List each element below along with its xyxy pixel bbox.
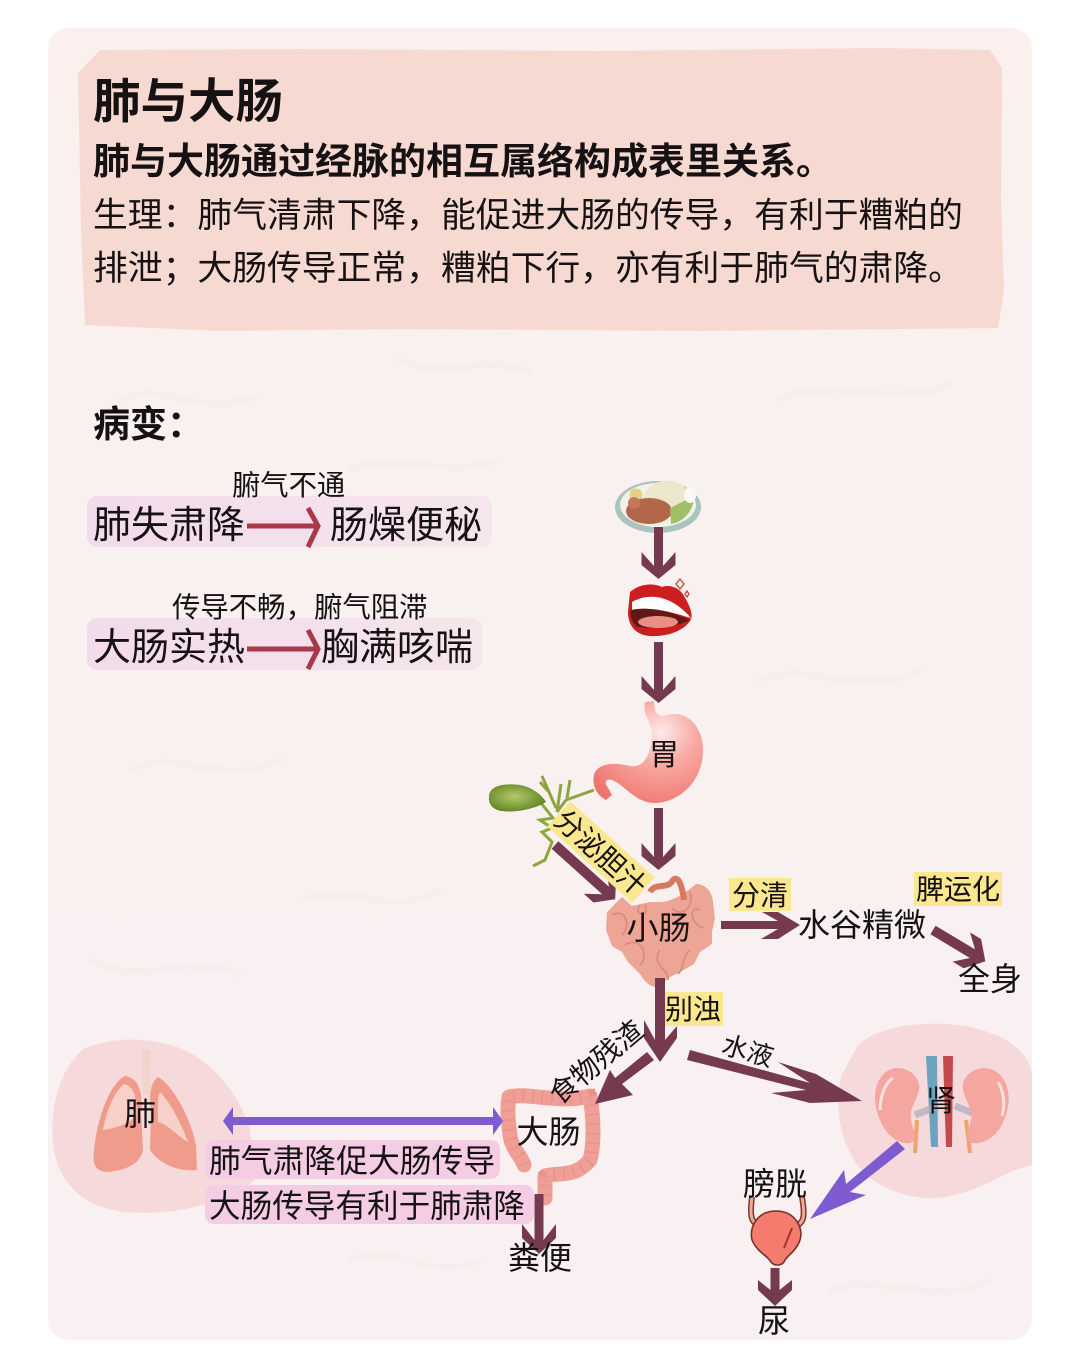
kidney background blob [838,1024,1032,1198]
label: kidney: 肾 [926,1085,956,1118]
arrow: large intestine to stool [522,1194,556,1254]
arrow: fluid to kidney [687,1050,862,1103]
panel: intro [78,48,1004,331]
label: lung: 肺 [124,1096,156,1132]
label: bladder: 膀胱 [743,1166,807,1202]
pathology row 2 [87,592,482,670]
label: spleen transport: 脾运化 [916,874,1000,905]
arrow: stomach to small intestine [642,808,676,870]
icon: lungs [94,1050,197,1172]
label: stomach: 胃 [649,739,679,772]
callout: lung-intestine interaction: 肺气肃降促大肠传导 [209,1143,495,1179]
pathology row 2: 传导不畅，腑气阻滞 [172,592,428,624]
heading: pathology: 病变： [93,404,204,445]
arrow: small intestine to essence [721,912,800,939]
arrow: residue to large intestine [595,1052,654,1104]
label: stool: 粪便 [508,1240,572,1276]
label: separate clear: 分清 [732,880,788,911]
icon: large intestine [508,1096,593,1198]
arrow: lung and large intestine double arrow [223,1107,503,1135]
icon: stomach [594,701,703,803]
body text: 生理：肺气清肃下降，能促进大肠的传导，有利于糟粕的 [93,196,963,235]
pathology row 2: 胸满咳喘 [321,627,473,669]
arrow: bile to small intestine [544,832,627,912]
arrow: red [247,630,318,669]
body text [93,196,963,288]
label: separate turbid: 别浊 [665,994,721,1025]
title: 肺与大肠 [93,76,283,129]
icon: food plate [615,481,701,533]
pathology row 1: 肺失肃降 [93,505,245,547]
pathology row 1: 肠燥便秘 [330,505,482,547]
label: urine: 尿 [758,1303,790,1339]
arrow: kidney to bladder [810,1141,905,1219]
arrow: food to mouth [642,527,676,579]
pathology row 1: 腑气不通 [232,469,345,501]
label: water and grain essence: 水谷精微 [798,907,926,943]
label: large intestine: 大肠 [516,1114,581,1150]
label: small intestine: 小肠 [626,910,691,946]
label: whole body: 全身 [958,961,1022,997]
label: food residue: 食物残渣 [543,1015,649,1110]
arrow: mouth to stomach [642,642,676,703]
icon: bladder [751,1197,804,1265]
callout: lung-intestine interaction [205,1140,534,1224]
subtitle: 肺与大肠通过经脉的相互属络构成表里关系。 [93,141,833,182]
icon: kidneys [875,1056,1009,1153]
arrow: essence to whole body [924,915,994,976]
callout: lung-intestine interaction: 大肠传导有利于肺肃降 [209,1188,525,1224]
pathology row 2: 大肠实热 [93,627,245,669]
pathology row 1 [87,469,492,547]
icon: mouth [628,579,692,636]
arrow: bladder to urine [758,1268,792,1306]
lung background blob [52,1040,255,1213]
icon: small intestine [606,879,715,987]
label: fluid: 水液 [719,1029,777,1073]
label: secrete bile: 分泌胆汁 [548,804,652,902]
icon: gallbladder and ducts [489,776,594,866]
arrow: red [247,508,318,547]
body text: 排泄；大肠传导正常，糟粕下行，亦有利于肺气的肃降。 [93,249,963,288]
arrow: small intestine downward [644,978,677,1062]
